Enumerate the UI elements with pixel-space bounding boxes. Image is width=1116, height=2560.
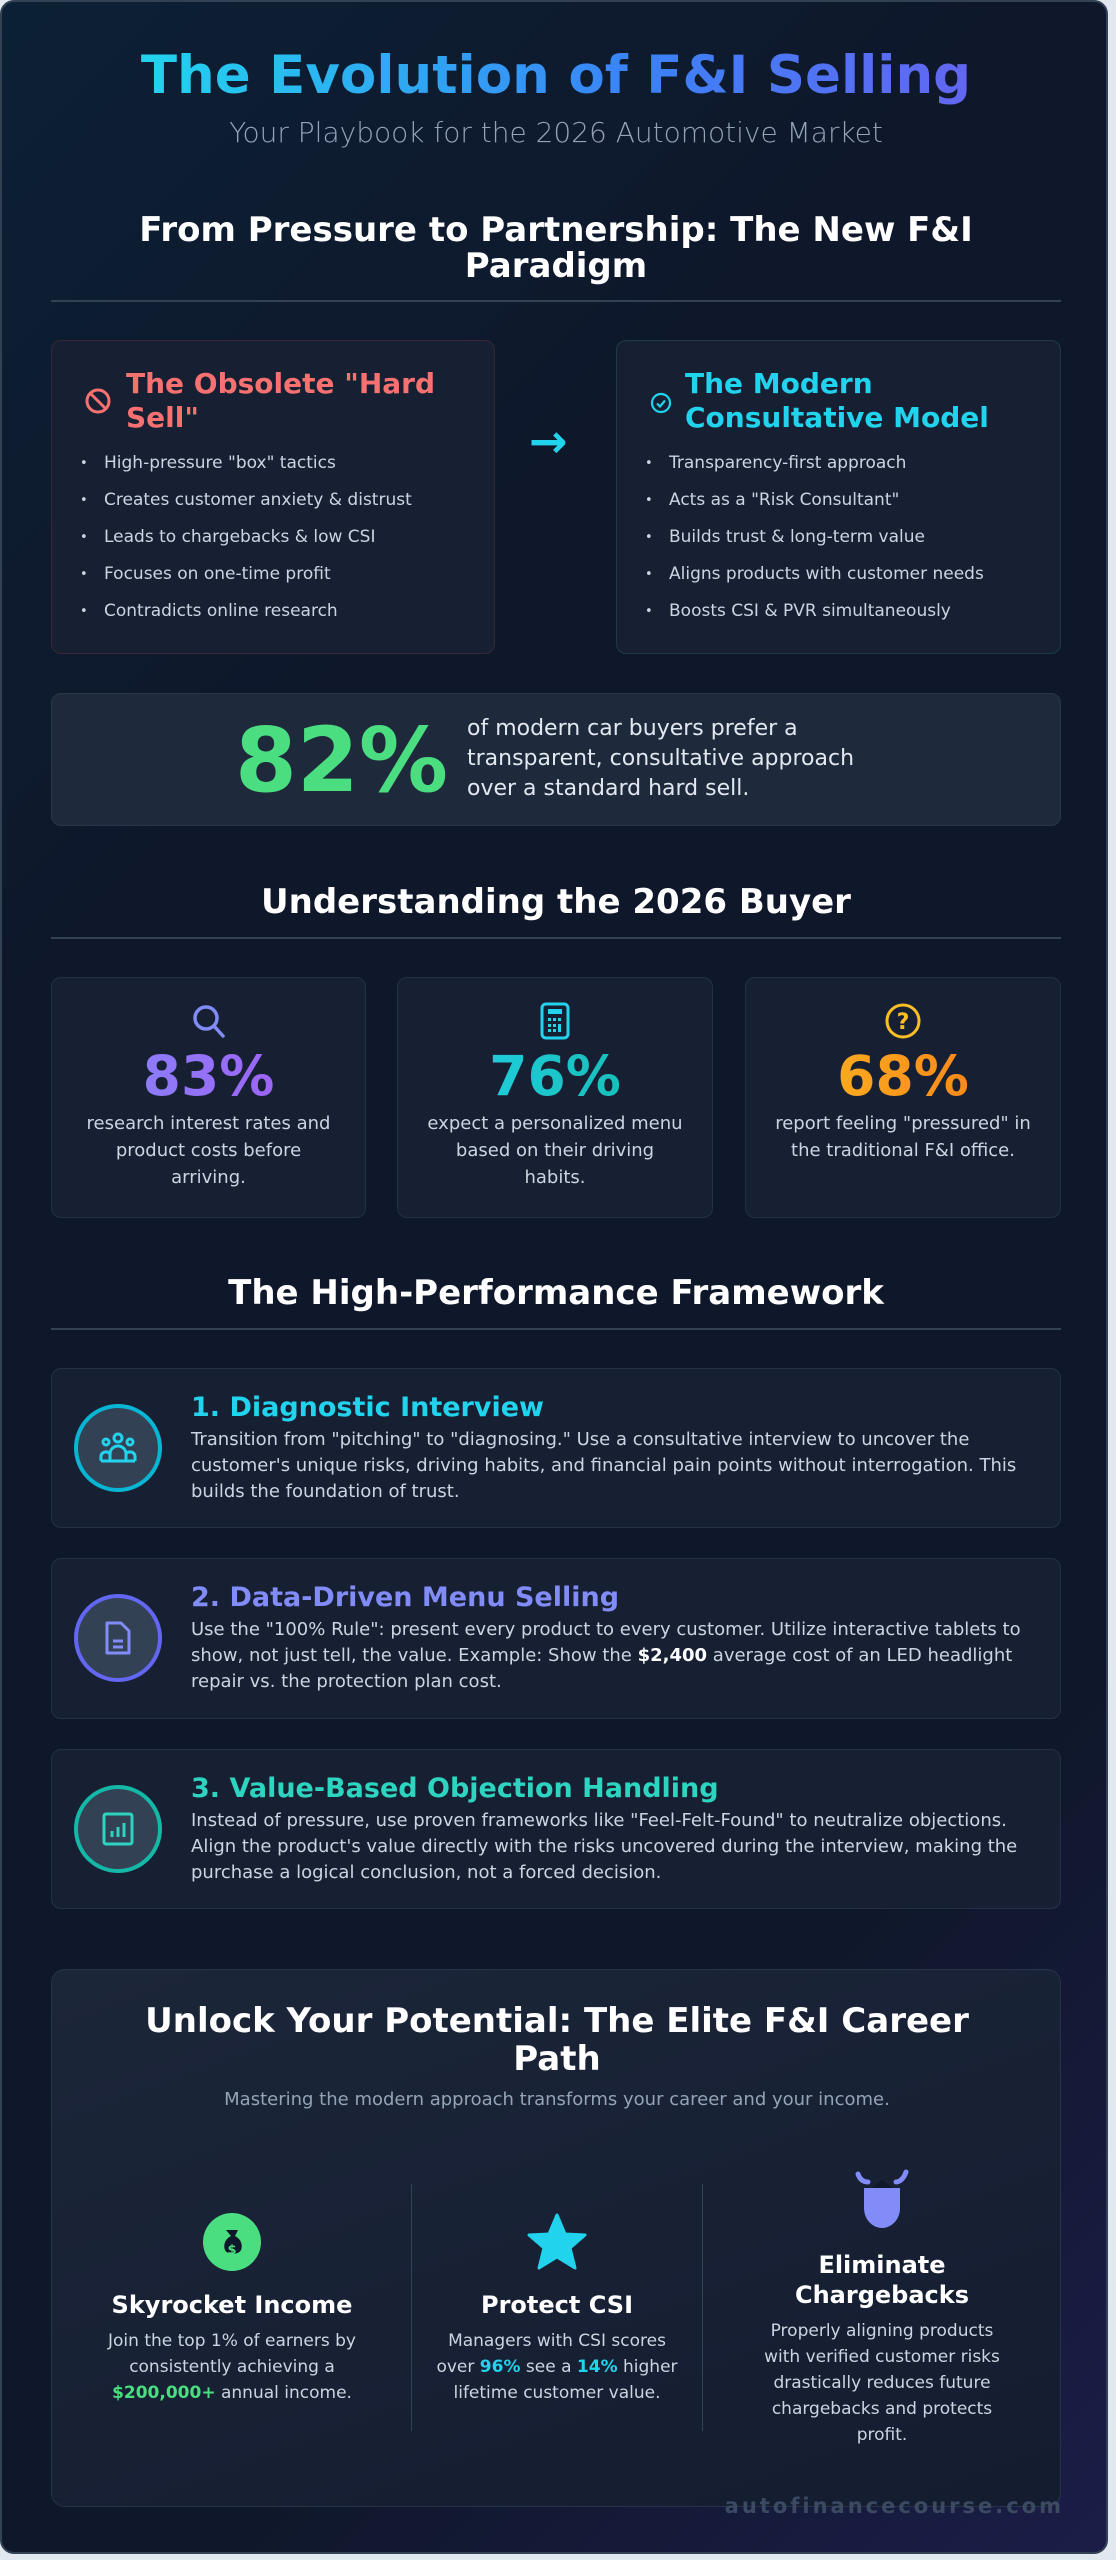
column: CSI: Managers with CSI scores over 96% see a 14% higher lifetime customer value. — [436, 2331, 678, 2403]
list: hard sell: Contradicts online research — [104, 601, 338, 621]
subtitle: career: Mastering the modern approach transforms your career and your income. — [224, 2089, 890, 2110]
column: CSI: Protect CSI — [481, 2291, 633, 2319]
list: hard sell: Leads to chargebacks & low CSI — [104, 527, 375, 547]
icon: money bag — [203, 2213, 261, 2271]
icon: question: ? — [897, 1010, 909, 1035]
list: consultative: Builds trust & long-term value — [669, 527, 925, 547]
stat card: 83%: product costs before — [116, 1140, 301, 1161]
icon: people — [74, 1404, 162, 1492]
panel: consultative — [616, 340, 1061, 654]
stat card: 76%: habits. — [524, 1167, 586, 1188]
list: consultative: Transparency-first approach — [669, 453, 906, 473]
heading: pressure to partnership: From Pressure to Partnership: The New F&I — [139, 210, 973, 250]
list: consultative: Acts as a "Risk Consultant" — [669, 490, 899, 510]
icon: star — [527, 2214, 586, 2270]
list: hard sell: Focuses on one-time profit — [104, 564, 331, 584]
stat card: 76%: 76% — [489, 1044, 621, 1108]
icon: money bag: $ — [227, 2243, 237, 2258]
text: 82%: transparent, consultative approach — [467, 746, 854, 771]
stat card: 68%: 68% — [837, 1044, 969, 1108]
list: consultative: Aligns products with customer needs — [669, 564, 984, 584]
text: 82%: over a standard hard sell. — [467, 776, 749, 801]
stat card: 83%: arriving. — [171, 1167, 246, 1188]
text: step 2 — [191, 1582, 1021, 1692]
text: step 3 — [191, 1773, 1017, 1883]
list: consultative: Boosts CSI & PVR simultaneously — [669, 601, 951, 621]
heading: consultative: Consultative Model — [685, 401, 989, 434]
stat card: 83% — [51, 977, 366, 1218]
heading: consultative: The Modern — [685, 367, 873, 400]
heading: career — [145, 2001, 969, 2079]
heading: hard sell — [126, 367, 435, 434]
column: income: Skyrocket Income — [112, 2291, 352, 2319]
stat card: 76%: expect a personalized menu — [427, 1113, 683, 1134]
framework card 3 — [51, 1749, 1061, 1909]
column: income — [107, 2213, 356, 2403]
stat card: 76%: based on their driving — [456, 1140, 654, 1161]
subtitle: Your Playbook for the 2026 Automotive Market — [229, 116, 883, 149]
list: hard sell — [82, 453, 412, 621]
column: CSI — [436, 2214, 678, 2403]
stat card: 68%: report feeling "pressured" in — [775, 1113, 1031, 1134]
text: step 3: Instead of pressure, use proven frameworks like "Feel-Felt-Found" to neutralize objections. Align the product's value directly with the risks uncovered during the interview, making the purchase a logical conclusion, not a forced decision. — [191, 1810, 1017, 1883]
framework card 2 — [51, 1558, 1061, 1719]
column: chargebacks — [764, 2170, 1000, 2445]
stat card: 68%: the traditional F&I office. — [791, 1140, 1015, 1161]
icon: question — [886, 1004, 920, 1038]
column: chargebacks: Properly aligning products with verified customer risks drastically reduces future chargebacks and protects profit. — [764, 2321, 1000, 2445]
list: consultative — [647, 453, 984, 621]
title: The Evolution of F&I Selling — [141, 45, 971, 106]
heading: pressure to partnership — [139, 210, 973, 286]
panel: career path — [51, 1969, 1061, 2507]
arrow: → — [529, 414, 568, 468]
heading: hard sell: Sell" — [126, 401, 199, 434]
column: chargebacks: Chargebacks — [795, 2281, 969, 2309]
text: 82%: of modern car buyers prefer a — [467, 716, 798, 741]
column: income: Join the top 1% of earners by consistently achieving a $200,000+ annual income. — [108, 2331, 356, 2403]
list: hard sell: Creates customer anxiety & distrust — [104, 490, 412, 510]
icon: check — [650, 392, 672, 414]
icon: chart — [74, 1785, 162, 1873]
text: step 2: 2. Data-Driven Menu Selling — [191, 1582, 619, 1613]
stat card: 83%: 83% — [143, 1044, 274, 1108]
heading: framework: The High-Performance Framework — [228, 1273, 884, 1313]
stat: 82%: 82% — [235, 708, 448, 812]
icon: document — [74, 1594, 162, 1682]
icon: shield — [856, 2170, 908, 2228]
text: step 1: Transition from "pitching" to "diagnosing." Use a consultative interview to uncover the customer's unique risks, driving habits, and financial pain points without interrogation. This builds the foundation of trust. — [191, 1429, 1016, 1502]
framework card 1 — [51, 1368, 1061, 1528]
text: 82% — [467, 716, 854, 801]
callout: 82% — [51, 693, 1061, 826]
heading: pressure to partnership: Paradigm — [465, 246, 647, 286]
icon: ban — [86, 388, 110, 414]
stat card: 83%: research interest rates and — [87, 1113, 330, 1134]
icon: calculator — [540, 1002, 570, 1040]
stat card: 76% — [397, 977, 713, 1218]
text: step 1 — [190, 1392, 1016, 1502]
heading: hard sell: The Obsolete "Hard — [126, 367, 435, 400]
panel: hard sell — [51, 340, 495, 654]
column: chargebacks: Eliminate — [818, 2251, 946, 2279]
text: step 3: 3. Value-Based Objection Handling — [191, 1773, 719, 1804]
watermark: autofinancecourse.com — [725, 2494, 1064, 2518]
heading: career: Path — [513, 2039, 601, 2079]
text: step 2: Use the "100% Rule": present every product to every customer. Utilize interactive tablets to show, not just tell, the value. Example: Show the $2,400 average cost of an LED headlight repair vs. the protection plan cost. — [191, 1619, 1021, 1692]
list: hard sell: High-pressure "box" tactics — [104, 453, 336, 473]
stat card: 68% — [745, 977, 1061, 1218]
text: step 1: 1. Diagnostic Interview — [191, 1392, 544, 1423]
icon: search — [193, 1005, 225, 1038]
heading: career: Unlock Your Potential: The Elite F&I Career — [145, 2001, 969, 2041]
heading: buyer: Understanding the 2026 Buyer — [261, 882, 851, 922]
heading: consultative — [685, 367, 989, 434]
